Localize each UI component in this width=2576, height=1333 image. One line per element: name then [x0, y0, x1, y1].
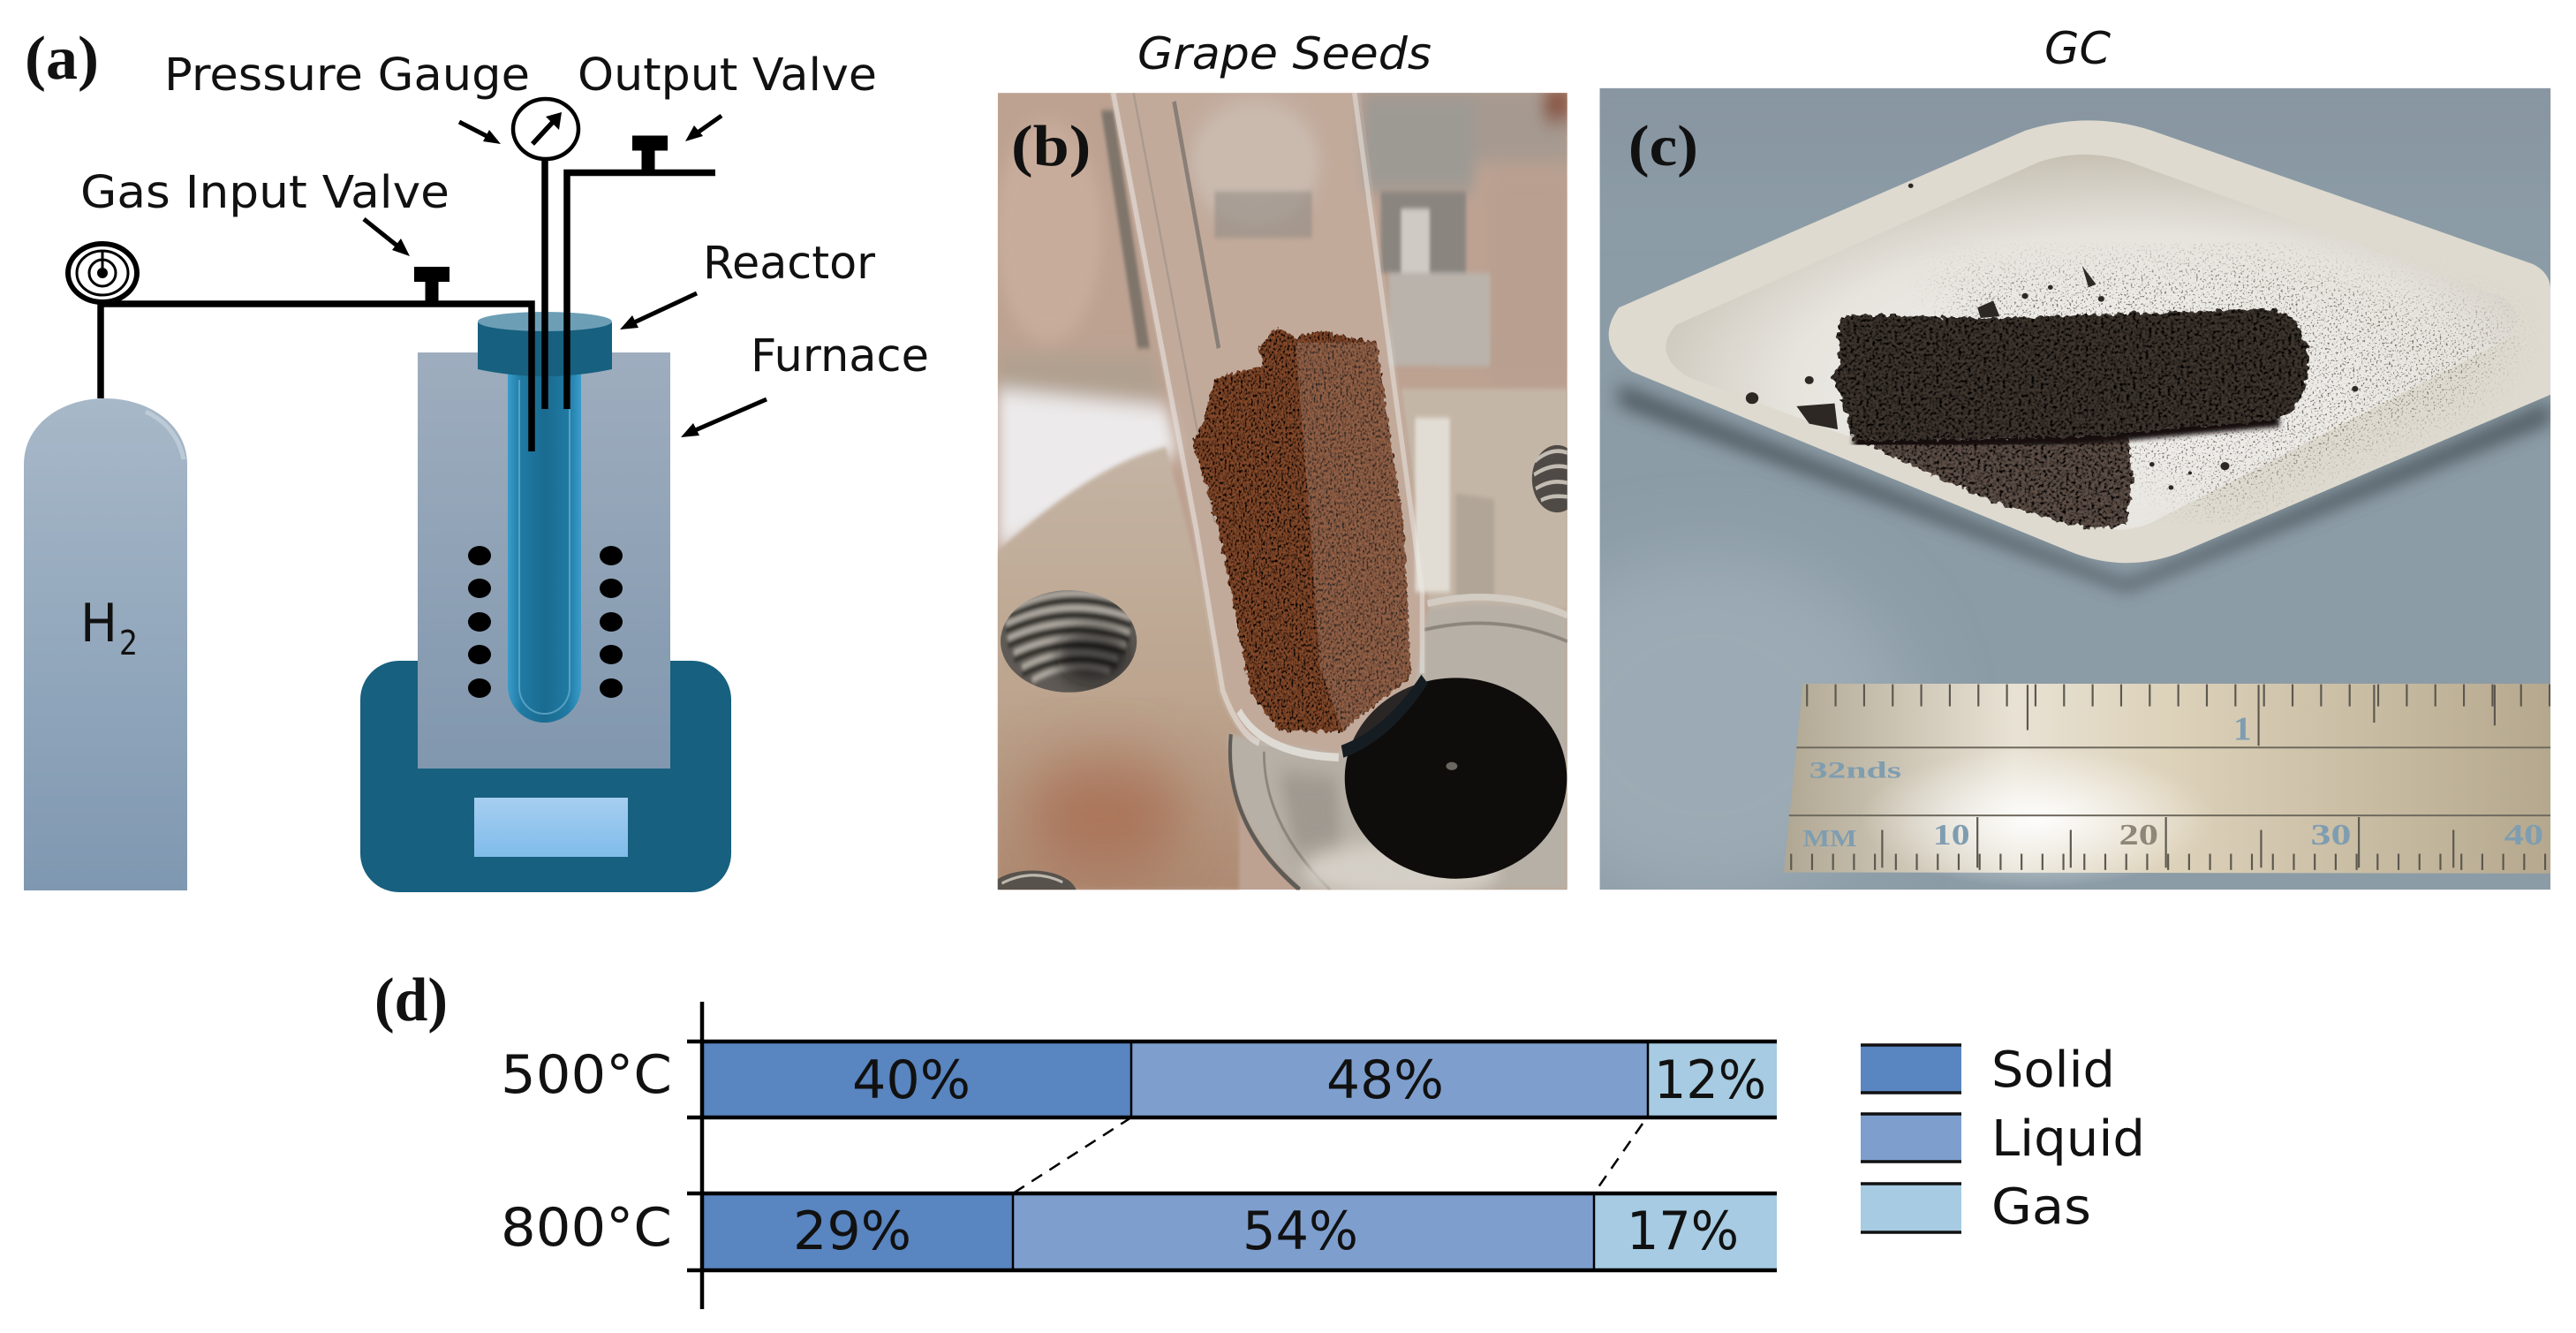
furnace with heater base: [360, 352, 731, 892]
bar: 800 C: 29%: [793, 1200, 911, 1262]
dashed connectors: [1013, 1117, 1643, 1193]
legend: Solid: [1991, 1041, 2115, 1099]
ruler: 20: [2119, 817, 2158, 852]
bar: 800 C: 54%: [1243, 1200, 1358, 1262]
panel a: reactor schematic: [24, 25, 929, 892]
pressure gauge: [513, 99, 578, 159]
bar: 500 C: [702, 1041, 1777, 1117]
panel c: GC pellet photo: [1600, 88, 2550, 890]
panel label (c): (c): [1628, 114, 1698, 178]
label: Gas Input Valve: Gas Input Valve: [80, 167, 449, 219]
panel label (b): (b): [1011, 115, 1091, 178]
ruler: [1784, 684, 2550, 888]
pressure regulator: [68, 244, 137, 302]
panel label (d): (d): [374, 966, 448, 1034]
label arrows: [364, 116, 767, 437]
threaded hole: [1001, 590, 1137, 693]
ruler: 10: [1933, 817, 1970, 852]
ruler: 1: [2233, 709, 2252, 747]
bar: 800 C: [702, 1193, 1777, 1270]
H2 gas cylinder: 2: [119, 624, 138, 663]
ruler: 32nds: [1809, 757, 1901, 783]
H2 gas cylinder: [24, 398, 187, 890]
axis with ticks: [687, 1002, 702, 1309]
label: Output Valve: Output Valve: [578, 49, 877, 102]
H2 gas cylinder: H: [80, 593, 117, 655]
legend: Gas: [1991, 1178, 2091, 1236]
bar: 500 C: 40%: [852, 1049, 971, 1111]
axis label 800 C: 800°C: [501, 1197, 672, 1259]
legend: Liquid: [1991, 1110, 2145, 1168]
heading: Grape Seeds: Grape Seeds: [1137, 28, 1432, 80]
gas and output lines with valves: [101, 143, 715, 451]
panel b: grape seeds photo: [987, 87, 1583, 917]
panel d: product yield stacked bar chart: [374, 966, 2145, 1309]
bar: 800 C: 17%: [1627, 1200, 1739, 1262]
reactor tube and cap: [478, 312, 612, 723]
ruler: 40: [2504, 817, 2543, 852]
heading: GC: GC: [2044, 23, 2111, 74]
legend: [1861, 1041, 2145, 1236]
tray: [1609, 120, 2550, 563]
label: Furnace: Furnace: [751, 330, 929, 382]
label: Pressure Gauge: Pressure Gauge: [164, 49, 530, 102]
bar: 500 C: 12%: [1654, 1049, 1766, 1111]
label: Reactor: Reactor: [703, 238, 875, 290]
ruler: 30: [2311, 817, 2352, 852]
axis label 500 C: 500°C: [501, 1044, 672, 1106]
ruler: MM: [1803, 825, 1857, 852]
bar: 500 C: 48%: [1326, 1049, 1444, 1111]
panel label (a): (a): [25, 25, 99, 93]
